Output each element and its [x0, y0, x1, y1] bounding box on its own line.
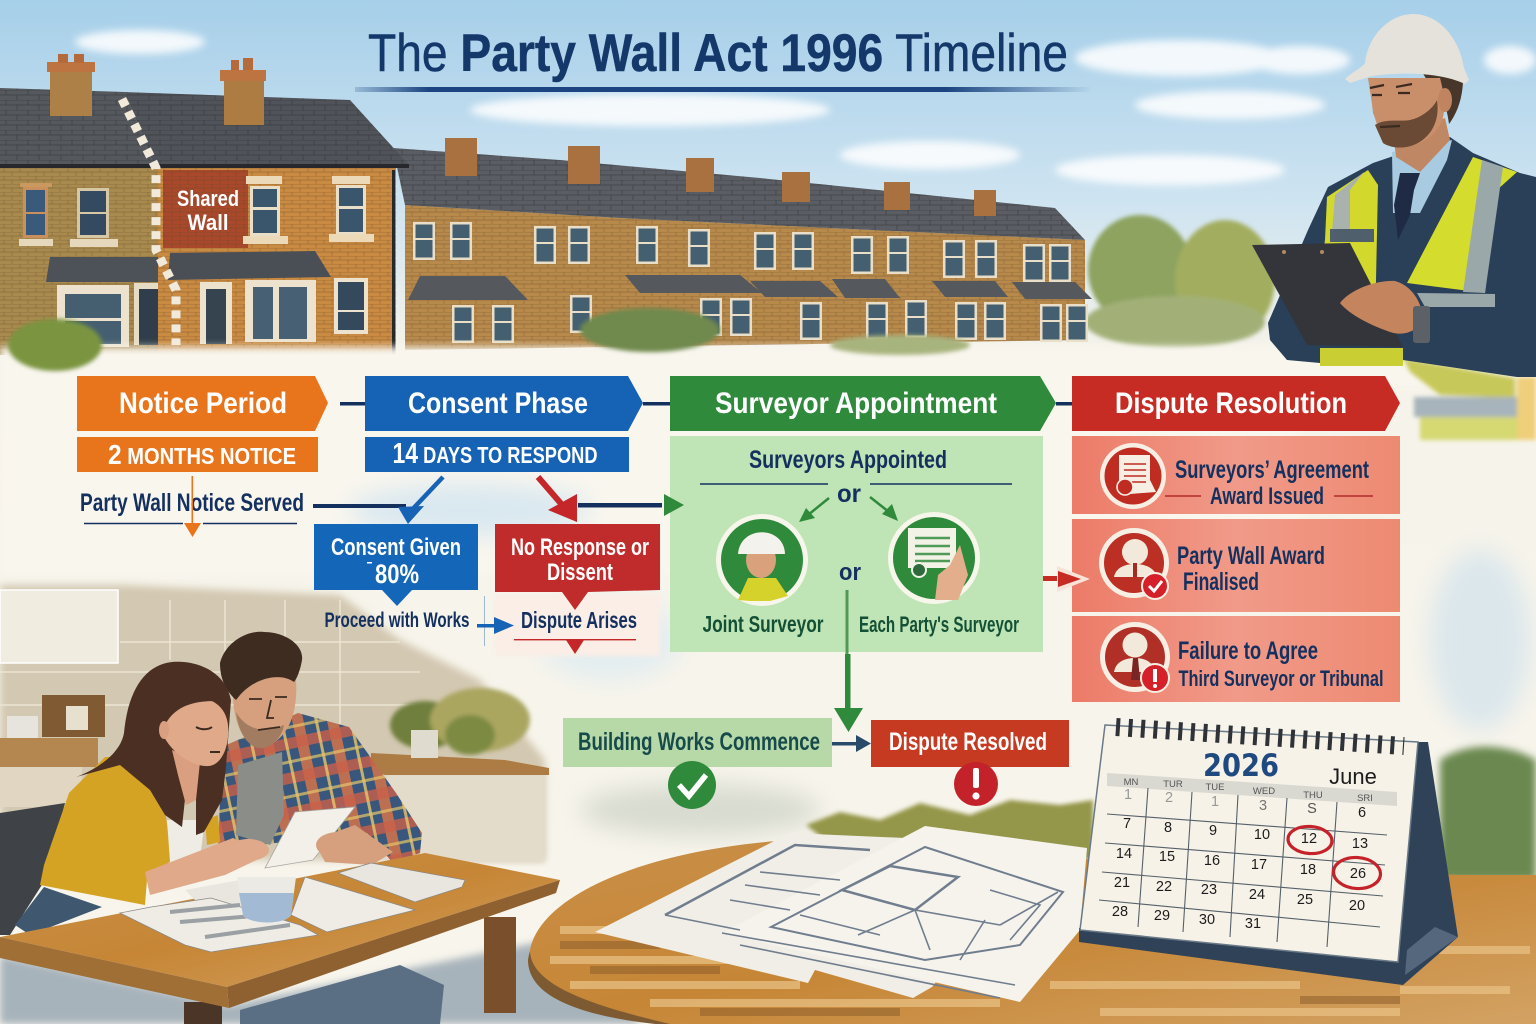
column: consent phase	[313, 376, 660, 656]
calendar dates: 16	[1204, 853, 1220, 869]
neck	[1394, 118, 1450, 172]
woman's neck	[172, 750, 200, 805]
plant pot	[411, 730, 438, 758]
calendar dates: 26	[1350, 866, 1366, 882]
kitchen tiled wall	[0, 585, 545, 860]
man's hair	[220, 632, 302, 700]
hair	[1422, 72, 1463, 124]
line and arrow into surveyor panel	[578, 494, 684, 516]
right background greenery	[806, 747, 1536, 880]
hard hat	[1345, 14, 1469, 84]
arrow: consent given	[398, 477, 443, 524]
far terrace	[393, 138, 1092, 350]
back sheet	[595, 833, 1000, 998]
round table	[528, 840, 1536, 1024]
calendar dates: 12	[1301, 831, 1317, 847]
man's head	[233, 672, 296, 748]
shirt and tie	[1392, 140, 1452, 213]
couple at table illustration	[0, 632, 560, 1024]
panel: surveyors' agreement	[1072, 436, 1400, 514]
calendar dates: 30	[1199, 912, 1215, 928]
panel: failure to agree: Third Surveyor or Tribunal	[1178, 666, 1384, 691]
calendar dates: 9	[1209, 823, 1217, 839]
man's t-shirt	[236, 752, 284, 845]
calendar page	[1080, 725, 1418, 962]
canister	[7, 716, 38, 747]
calendar dates: 8	[1164, 820, 1172, 836]
woman's top	[167, 820, 205, 862]
party wall notice served: Party Wall Notice Served	[80, 489, 304, 517]
calendar dates: 20	[1349, 898, 1365, 914]
arrow left	[799, 498, 829, 522]
calendar dates: 10	[1254, 827, 1270, 843]
icon: check	[668, 761, 716, 809]
calendar dates: 15	[1159, 849, 1175, 865]
arrow: notice down	[184, 476, 201, 537]
calendar weekday strip: SRI	[1357, 793, 1373, 804]
panel: party wall award	[1072, 519, 1400, 612]
woman's forearm	[145, 838, 267, 895]
surveyor heading: Surveyor Appointment	[715, 387, 997, 420]
papers on table	[120, 863, 465, 952]
calendar dates: 6	[1358, 805, 1366, 821]
calendar weekday strip: TUE	[1206, 782, 1224, 793]
calendar dates: 29	[1154, 908, 1170, 924]
or text top: or	[837, 480, 861, 508]
consent given box: Consent Given	[331, 534, 461, 561]
icon: exclamation	[954, 762, 998, 806]
notice period heading	[77, 376, 328, 431]
worker hand	[1340, 281, 1423, 334]
icon: failure person	[1100, 622, 1170, 692]
dispute heading: Dispute Resolution	[1115, 387, 1347, 420]
shared wall label	[177, 186, 239, 235]
arrow: works to resolved	[832, 735, 871, 752]
consent duration: 14 DAYS TO RESPOND	[392, 438, 598, 470]
background trees	[1085, 215, 1275, 348]
calendar dates: 31	[1245, 916, 1261, 932]
pale blue washes	[350, 484, 1530, 836]
arrow: no response	[538, 477, 577, 522]
no response box: Dissent	[547, 559, 613, 586]
site worker illustration	[1252, 14, 1536, 440]
head	[1368, 78, 1444, 147]
left counter	[0, 738, 98, 807]
watercolor fog	[0, 347, 1536, 575]
lower floor wash	[0, 930, 640, 1024]
surveyor panel	[670, 436, 1043, 652]
calendar month: June	[1329, 764, 1377, 789]
glass of water	[237, 877, 296, 922]
shared wall label: Shared	[177, 186, 239, 211]
eyes and mouth	[1370, 84, 1412, 127]
building works commence box	[563, 718, 832, 767]
column: surveyor appointment	[578, 376, 1056, 732]
calendar dates: 1	[1211, 794, 1219, 810]
chair	[0, 803, 65, 935]
calendar weekday strip: MN	[1124, 777, 1139, 788]
woman's fringe	[160, 681, 231, 738]
beard	[1375, 100, 1438, 148]
calendar dates: 28	[1112, 904, 1128, 920]
right cupboards	[385, 773, 545, 863]
woman's face	[160, 697, 228, 766]
title: The Party Wall Act 1996 Timeline	[368, 24, 1068, 83]
wristwatch	[1413, 306, 1430, 343]
dispute resolved box	[871, 720, 1069, 767]
panel: surveyors' agreement: Surveyors’ Agreement	[1175, 456, 1369, 484]
bread box	[42, 695, 105, 737]
dispute resolved box: Dispute Resolved	[889, 728, 1047, 756]
each party's surveyor label: Each Party's Surveyor	[859, 612, 1019, 637]
man's eyes and mouth	[249, 697, 287, 730]
icon: award person	[1099, 528, 1169, 599]
panel: party wall award: Party Wall Award	[1177, 542, 1325, 570]
ear	[1438, 88, 1452, 112]
blueprints	[595, 826, 1087, 1002]
woman's cardigan	[40, 757, 172, 905]
spiral binding	[1116, 727, 1404, 746]
near house right	[0, 58, 409, 355]
right counter	[371, 753, 549, 775]
panel: failure to agree	[1072, 616, 1400, 702]
jacket	[1268, 137, 1536, 377]
woman	[15, 662, 267, 935]
kitchen background	[0, 585, 549, 863]
column: dispute resolution	[1043, 376, 1400, 702]
calendar stand	[1079, 742, 1458, 985]
calendar weekday strip: WED	[1253, 786, 1275, 797]
consent phase heading	[365, 376, 643, 431]
calendar dates	[1112, 787, 1368, 932]
terraced houses illustration	[0, 54, 1092, 355]
calendar dates: S	[1307, 801, 1317, 817]
front sheet	[722, 826, 1087, 1002]
calendar dates: 2	[1165, 790, 1173, 806]
calendar	[1079, 725, 1458, 985]
calendar dates: 21	[1114, 875, 1130, 891]
surveyors appointed: Surveyors Appointed	[749, 446, 947, 474]
panel: party wall award: Finalised	[1183, 568, 1259, 596]
tile lines	[0, 600, 420, 740]
woman's eye, ear and lips	[159, 721, 220, 752]
kitchen table	[0, 853, 560, 987]
held document	[265, 807, 355, 868]
man's stubble	[236, 712, 284, 748]
line from notice to consent	[313, 504, 406, 508]
pale wash behind dispute arises	[495, 594, 660, 656]
no response box: No Response or	[511, 534, 649, 561]
calendar dates: 13	[1352, 836, 1368, 852]
proceed with works: Proceed with Works	[324, 609, 470, 632]
man	[218, 632, 422, 863]
near house left	[0, 54, 172, 355]
shared wall label: Wall	[188, 210, 228, 235]
panel: failure to agree: Failure to Agree	[1178, 637, 1318, 665]
calendar dates: 7	[1123, 816, 1131, 832]
plant	[390, 688, 530, 755]
under-table legs	[184, 917, 516, 1024]
lower vest remains	[1403, 358, 1536, 440]
arrow: surveyor to works	[834, 590, 863, 732]
calendar dates: 23	[1201, 882, 1217, 898]
panel: surveyors' agreement: Award Issued	[1210, 483, 1324, 510]
no response box	[495, 524, 660, 610]
surveyor heading	[670, 376, 1056, 431]
dispute arises	[514, 607, 637, 654]
calendar dates: 22	[1156, 879, 1172, 895]
clouds	[75, 30, 1536, 185]
calendar dates: 14	[1116, 846, 1132, 862]
calendar dates: 25	[1297, 892, 1313, 908]
hi-vis vest	[1310, 157, 1517, 366]
woman's hand	[227, 839, 269, 861]
calendar dates: 3	[1259, 798, 1267, 814]
calendar dates: 17	[1251, 857, 1267, 873]
calendar weekday strip: THU	[1303, 790, 1323, 801]
calendar dates: 18	[1300, 862, 1316, 878]
man's shirt	[218, 713, 422, 863]
or text middle: or	[839, 559, 861, 586]
calendar weekday strip: TUR	[1163, 779, 1183, 790]
calendar highlighted dates	[1287, 825, 1382, 890]
calendar dates: 1	[1124, 787, 1132, 803]
plan lines	[665, 845, 1063, 998]
joint surveyor label: Joint Surveyor	[702, 611, 824, 637]
building works commence box: Building Works Commence	[578, 728, 820, 756]
arrow right	[870, 497, 898, 521]
calendar year: 2026	[1203, 748, 1279, 784]
connector: surveyor to dispute	[1056, 402, 1073, 406]
icon: each party's surveyor	[888, 512, 980, 604]
calendar weekday strip	[1107, 773, 1397, 806]
icon: agreement	[1100, 443, 1166, 509]
woman's long hair	[76, 662, 231, 835]
dispute heading	[1072, 376, 1400, 431]
clipboard	[1252, 243, 1403, 347]
calendar dates: 24	[1249, 887, 1265, 903]
notice period heading: Notice Period	[119, 387, 287, 420]
consent given box: 80%	[375, 559, 419, 589]
consent given box	[314, 524, 478, 606]
arrow: proceed to dispute	[477, 596, 514, 646]
connector: consent to surveyor	[643, 402, 671, 406]
foreground bushes	[8, 308, 970, 371]
notice duration: 2 MONTHS NOTICE	[108, 439, 296, 470]
wall cabinet	[0, 590, 118, 663]
woman's jeans	[15, 887, 102, 935]
consent phase heading: Consent Phase	[408, 387, 588, 420]
arrow: into dispute panels	[1043, 566, 1090, 592]
man's hand	[316, 832, 360, 858]
dispute arises: Dispute Arises	[521, 607, 637, 633]
icon: joint surveyor	[716, 514, 808, 606]
connector: notice to consent	[340, 402, 365, 406]
column: notice period	[77, 376, 328, 537]
man's forearm and hand	[313, 825, 393, 865]
